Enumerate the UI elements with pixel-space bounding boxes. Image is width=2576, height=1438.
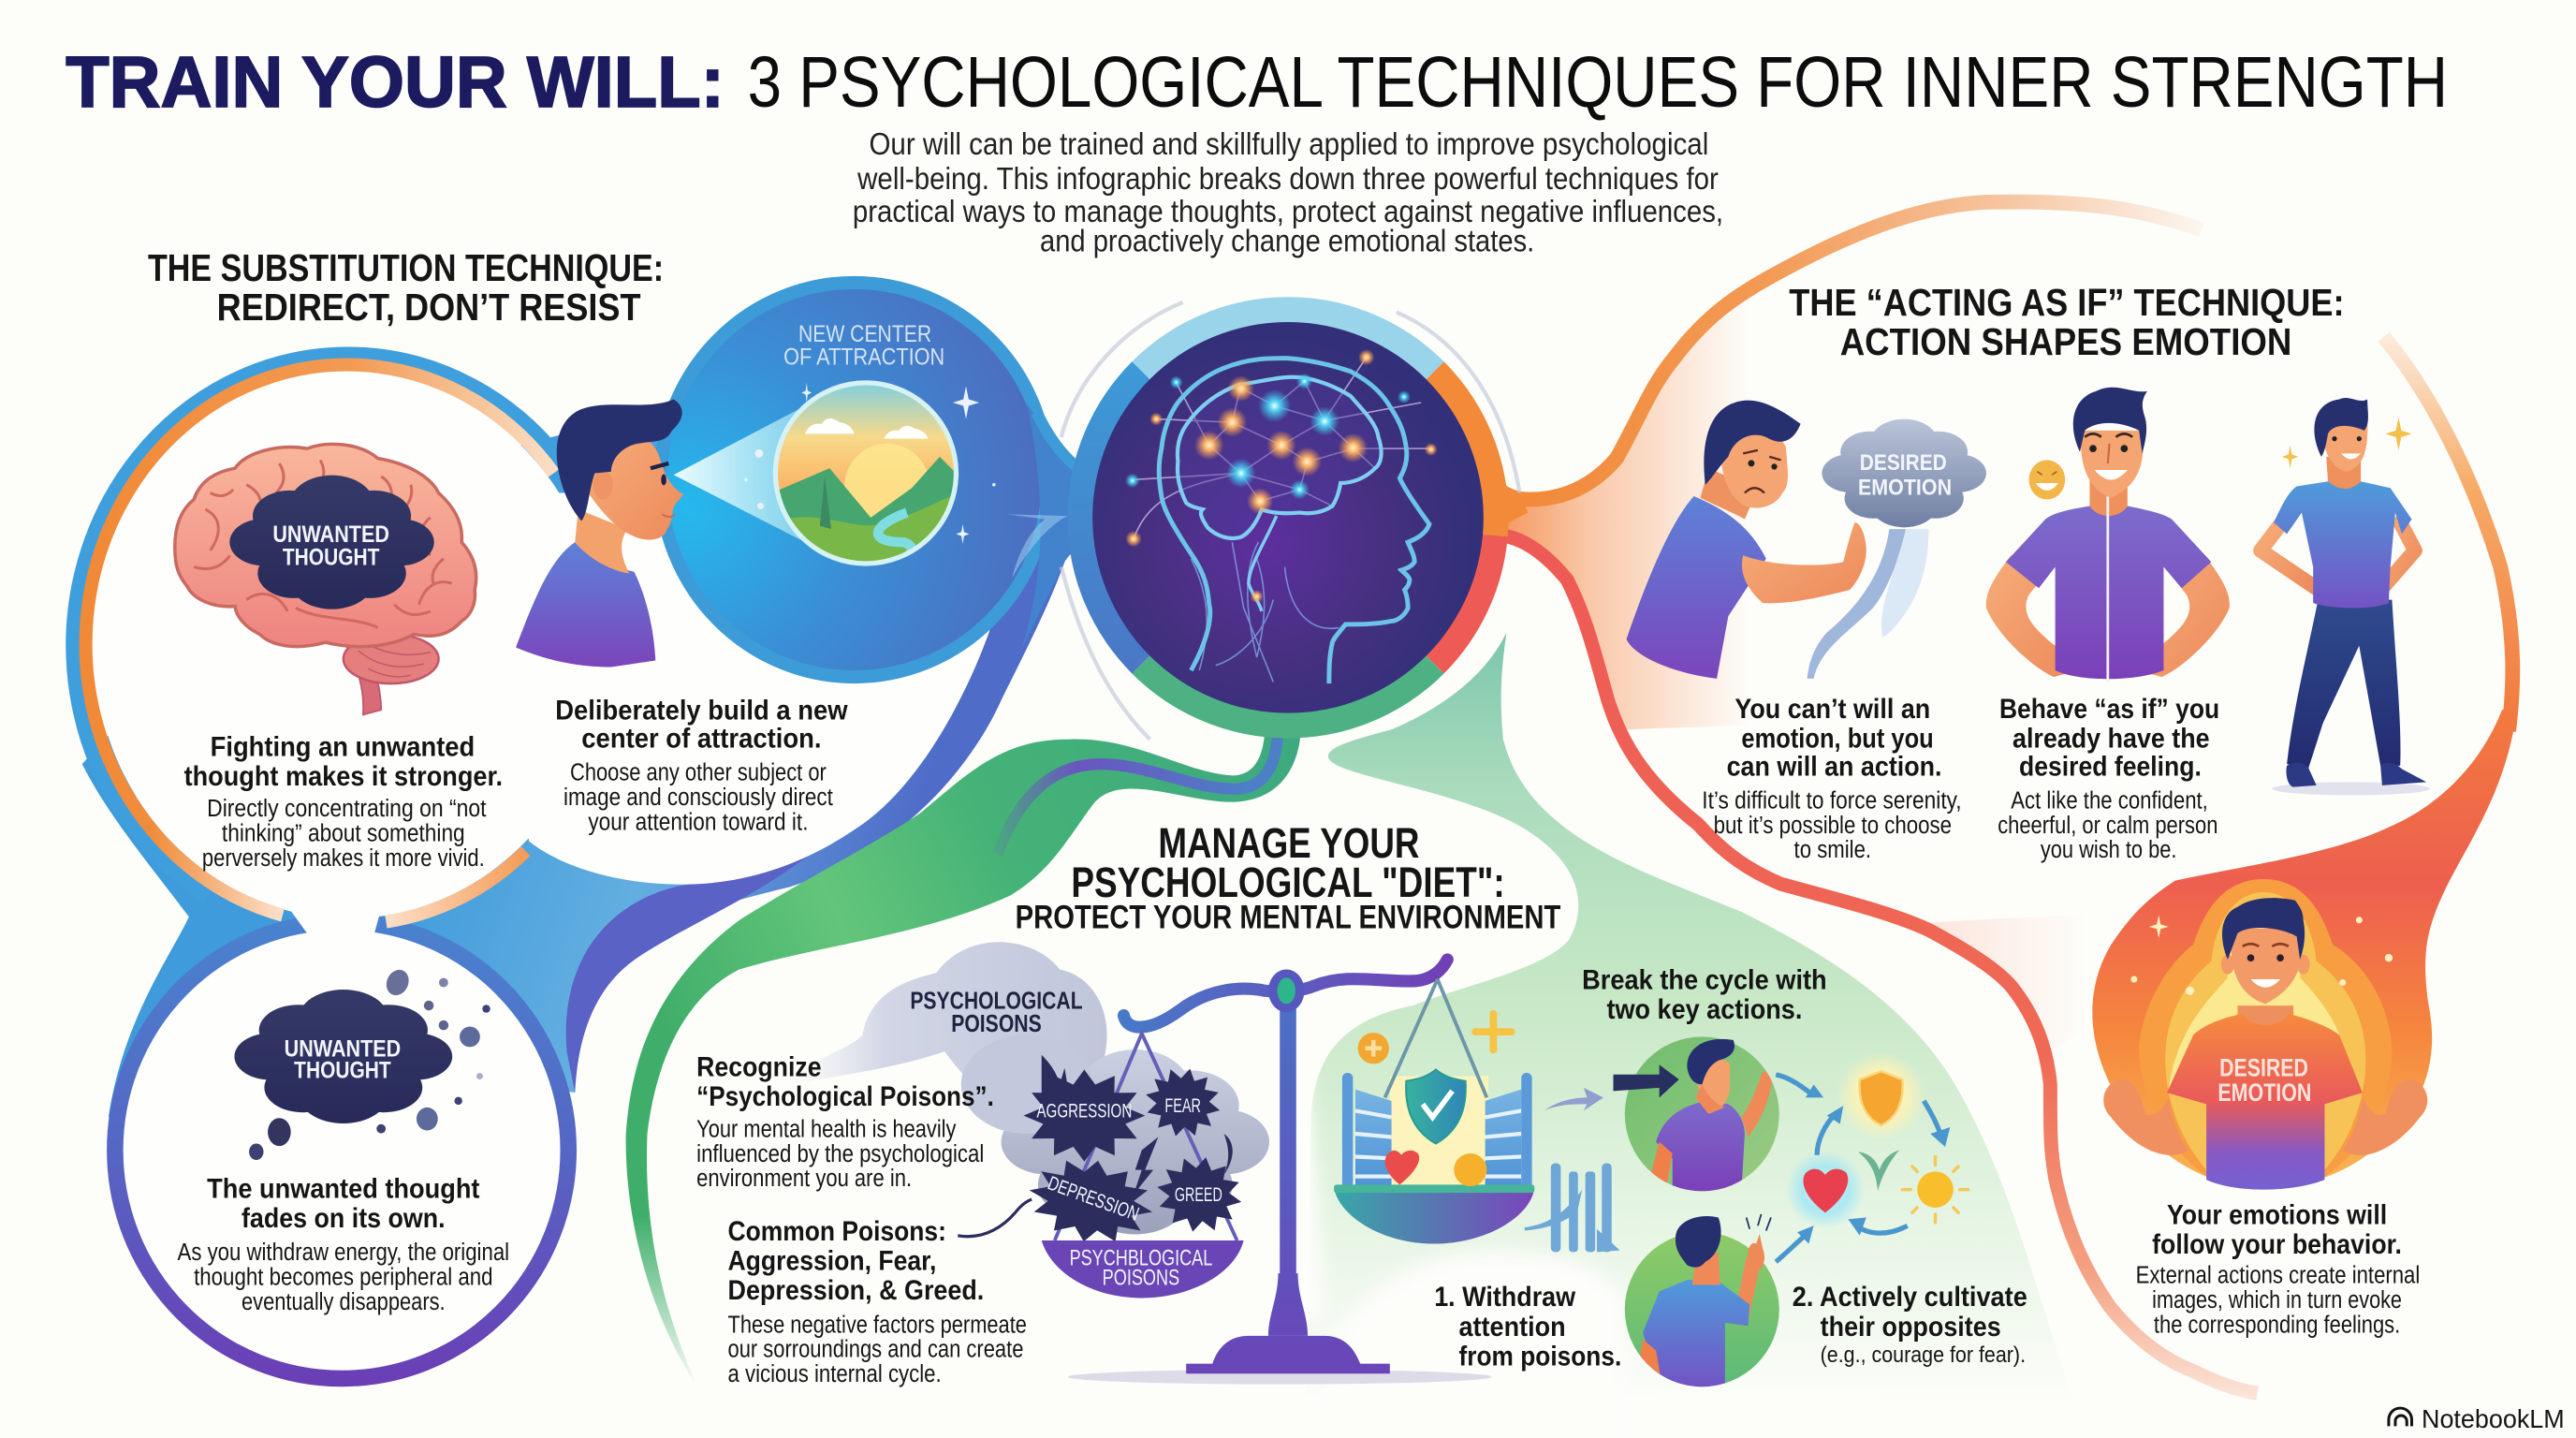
text: your emotions will follow: External actions create internal [2136, 1263, 2420, 1289]
left pan: PSYCHBLOGICAL [1070, 1246, 1212, 1270]
flame lobe: your emotions follow [2092, 710, 2517, 1188]
shirt label: desired emotion: DESIRED [2219, 1053, 2308, 1082]
orange connector arc [1484, 202, 2512, 731]
text: your emotions will follow: images, which in turn evoke [2152, 1287, 2402, 1313]
text: behave as if [1998, 694, 2219, 863]
brain with unwanted thought cloud [175, 444, 476, 714]
panel: manage your psychological diet [616, 633, 2073, 1438]
poison labels: POISONS [951, 1011, 1042, 1037]
text: recognize psychological poisons: “Psychological Poisons”. [696, 1081, 994, 1112]
cycle of opposites icons [1776, 1051, 1969, 1262]
heading: substitution technique [148, 246, 664, 329]
icon: sun coin [1454, 1153, 1486, 1186]
text: fighting an unwanted thought: thinking” about something [222, 821, 465, 847]
dark circle [1092, 322, 1484, 713]
orange ring on first lobe [86, 365, 553, 922]
central hub: head with glowing brain [1061, 302, 1519, 740]
text: withdraw attention: 1. Withdraw [1434, 1282, 1576, 1313]
heading: manage your psychological diet: MANAGE YOUR [1158, 819, 1419, 867]
heading: substitution technique: THE SUBSTITUTION TECHNIQUE: [148, 246, 664, 289]
blue connecting network [74, 318, 1104, 1117]
text: your emotions will follow: the corresponding feelings. [2154, 1312, 2400, 1338]
heading: manage your psychological diet: PSYCHOLOGICAL "DIET": [1071, 858, 1505, 906]
person with desired emotion [2103, 898, 2427, 1190]
icon: heart [1385, 1151, 1419, 1184]
icon: sprout [1858, 1151, 1899, 1191]
arrow into person [1614, 1064, 1679, 1097]
heading: manage your psychological diet: PROTECT YOUR MENTAL ENVIRONMENT [1016, 900, 1561, 936]
person: withdraw attention [1625, 1036, 1779, 1199]
text: deliberately build a new center: center of attraction. [581, 724, 822, 755]
text: you can't will an emotion [1702, 694, 1962, 863]
person looking at new center [516, 399, 683, 668]
text: the unwanted thought fades: fades on its own. [242, 1203, 446, 1234]
gold sparkles [2282, 418, 2411, 468]
text: common poisons: Depression, & Greed. [728, 1275, 984, 1306]
text: deliberately build a new center [555, 696, 848, 835]
fading cloud label: UNWANTED [285, 1036, 401, 1062]
text: the unwanted thought fades: eventually disappears. [242, 1289, 446, 1315]
poison labels: FEAR [1164, 1095, 1201, 1117]
icon: gold plus [1475, 1014, 1512, 1049]
lobe: unwanted thought fades [115, 922, 568, 1378]
neck joining hub [1022, 403, 1104, 649]
flame halo [2139, 879, 2392, 1177]
white gap between lobes [289, 909, 381, 945]
red connector arc [1486, 534, 2258, 1393]
text: common poisons: These negative factors permeate [728, 1312, 1027, 1338]
lobe: fighting an unwanted thought [94, 373, 603, 918]
cloud label [272, 522, 389, 571]
head outline [1159, 359, 1429, 683]
neural connections [1132, 357, 1431, 682]
icon: gold shield [1860, 1071, 1903, 1125]
arrow to person [1544, 1088, 1603, 1110]
brain outline [1178, 377, 1382, 538]
text: common poisons [728, 1216, 1027, 1387]
text: cultivate opposites: their opposites [1821, 1312, 2001, 1343]
swoosh on neck [1007, 514, 1068, 579]
text: cultivate opposites: (e.g., courage for fear). [1821, 1343, 2026, 1368]
text: recognize psychological poisons [696, 1052, 994, 1192]
text: break the cycle: two key actions. [1606, 994, 1802, 1025]
text: recognize psychological poisons: Your mental health is heavily [696, 1116, 957, 1142]
introduction text: Our will can be trained and skillfully applied to improve psychological [869, 127, 1708, 162]
glowing nodes [1125, 349, 1438, 603]
heading: substitution technique: REDIRECT, DON’T RESIST [217, 286, 641, 329]
text: deliberately build a new center: your attention toward it. [588, 809, 809, 835]
flame sparkles [2130, 916, 2393, 995]
text: recognize psychological poisons: environment you are in. [696, 1166, 912, 1192]
desired emotion cloud [1808, 419, 1986, 679]
text: your emotions will follow: follow your behavior. [2152, 1229, 2402, 1260]
label: new center of attraction: NEW CENTER [798, 322, 931, 347]
poison labels: PSYCHOLOGICAL [910, 989, 1083, 1015]
title [66, 42, 2448, 123]
NotebookLM logo: NotebookLM [2422, 1404, 2565, 1433]
text: common poisons: Common Poisons: [728, 1216, 946, 1247]
poison labels: GREED [1175, 1184, 1222, 1206]
scene: new center of attraction [772, 381, 959, 572]
light green background blob [1306, 633, 2073, 1400]
text: behave as if: you wish to be. [2041, 837, 2177, 863]
icon: smiling emoji [2029, 460, 2065, 500]
peach wash inside lobe [1486, 263, 1808, 729]
text: fighting an unwanted thought: thought makes it stronger. [184, 761, 503, 792]
text: cultivate opposites [1793, 1282, 2027, 1368]
label: new center of attraction: OF ATTRACTION [783, 345, 944, 371]
text: deliberately build a new center: image and consciously direct [564, 785, 833, 811]
text: you can't will an emotion: You can’t will an [1734, 694, 1930, 725]
text: you can't will an emotion: can will an action. [1727, 751, 1942, 782]
fading cloud label: THOUGHT [294, 1058, 391, 1083]
text: cultivate opposites: 2. Actively cultivate [1793, 1282, 2027, 1313]
introduction text: practical ways to manage thoughts, protect against negative influences, [853, 195, 1723, 229]
introduction text: well-being. This infographic breaks down three powerful techniques for [856, 162, 1719, 197]
introduction text [853, 127, 1723, 259]
text: behave as if: Act like the confident, [2011, 787, 2208, 814]
text: the unwanted thought fades: The unwanted thought [207, 1173, 480, 1204]
cloud label: UNWANTED [272, 522, 389, 548]
text: you can't will an emotion: to smile. [1794, 837, 1871, 863]
text: the unwanted thought fades: thought becomes peripheral and [194, 1264, 493, 1290]
right pan with protected gate [1334, 979, 1534, 1244]
text: behave as if: Behave “as if” you [1999, 694, 2219, 725]
text: your emotions will follow [2136, 1199, 2420, 1338]
desired emotion cloud: DESIRED [1860, 451, 1947, 476]
spinal stem [1249, 516, 1277, 611]
light cone [674, 404, 809, 544]
poison labels: DEPRESSION [1045, 1173, 1142, 1225]
icon: check [1423, 1091, 1453, 1117]
shirt label: desired emotion [2217, 1053, 2311, 1107]
desired emotion cloud: EMOTION [1858, 476, 1952, 500]
icon: plus coin [1358, 1033, 1389, 1064]
text: common poisons: Aggression, Fear, [728, 1246, 936, 1277]
poison labels [910, 989, 1222, 1225]
person standing confident [2261, 398, 2430, 795]
sparkles [744, 383, 996, 544]
poison pan strings [1055, 1034, 1237, 1240]
text: recognize psychological poisons: influenced by the psychological [696, 1141, 984, 1167]
poison labels: AGGRESSION [1036, 1100, 1132, 1122]
text: you can't will an emotion: but it’s possible to choose [1714, 813, 1952, 839]
scale stand [1068, 960, 1492, 1385]
green connector band [616, 723, 1301, 1397]
text: break the cycle [1582, 965, 1827, 1025]
withdrawal bars [1525, 1164, 1620, 1252]
psychological poisons smog clouds [788, 942, 1269, 1234]
text: withdraw attention: attention [1459, 1312, 1566, 1343]
title: TRAIN YOUR WILL: [66, 42, 724, 123]
icon: red heart [1803, 1169, 1848, 1212]
person acting as if, front view [1986, 388, 2230, 682]
text: common poisons: our sorroundings and can create [728, 1337, 1023, 1363]
left pan: POISONS [1103, 1266, 1179, 1290]
person pushing against emotion [1627, 401, 1866, 679]
hub ring segments [1080, 310, 1496, 726]
text: withdraw attention: from poisons. [1459, 1341, 1621, 1372]
text: deliberately build a new center: Deliberately build a new [555, 696, 848, 726]
text: fighting an unwanted thought [184, 731, 503, 872]
heading: acting as if technique: ACTION SHAPES EMOTION [1840, 320, 2291, 363]
panel: the substitution technique [74, 246, 1104, 1378]
soft white mound and left fade [1281, 1068, 1627, 1438]
thin swooshes [1061, 302, 1519, 740]
text: fighting an unwanted thought: perversely makes it more vivid. [202, 845, 485, 872]
shirt label: desired emotion: EMOTION [2217, 1078, 2311, 1107]
icon: shield [1406, 1070, 1466, 1143]
text: recognize psychological poisons: Recognize [696, 1052, 822, 1083]
cycle arrows [1776, 1075, 1950, 1262]
heading: acting as if technique: THE “ACTING AS IF” TECHNIQUE: [1789, 281, 2345, 324]
lobe: deliberately build a new center [493, 493, 990, 885]
cloud label: THOUGHT [283, 546, 379, 571]
text: you can't will an emotion: It’s difficult to force serenity, [1702, 787, 1962, 814]
text: the unwanted thought fades [178, 1173, 509, 1315]
icon: sun [1902, 1157, 1969, 1223]
new center circle [661, 283, 1048, 677]
text: break the cycle: Break the cycle with [1582, 965, 1827, 996]
person: cultivate opposites [1625, 1214, 1779, 1388]
heading: acting as if technique [1789, 281, 2345, 363]
poison starbursts [958, 1055, 1248, 1253]
text: common poisons: a vicious internal cycle. [728, 1361, 942, 1387]
text: withdraw attention [1434, 1282, 1621, 1372]
pink wash under lobe [1914, 912, 2136, 1051]
text: you can't will an emotion: emotion, but you [1741, 724, 1934, 755]
panel: the acting as if technique [1484, 202, 2517, 1393]
heading: manage your psychological diet [1016, 819, 1561, 936]
introduction text: and proactively change emotional states. [1040, 225, 1534, 259]
text: fighting an unwanted thought: Directly concentrating on “not [207, 796, 487, 822]
text: your emotions will follow: Your emotions will [2167, 1199, 2387, 1230]
left pan [1042, 1240, 1244, 1298]
fading cloud label [285, 1036, 401, 1083]
dark cloud in brain [229, 476, 434, 609]
text: fighting an unwanted thought: Fighting an unwanted [211, 731, 475, 762]
label: new center of attraction [783, 322, 944, 371]
text: the unwanted thought fades: As you withdraw energy, the original [178, 1240, 509, 1266]
text: deliberately build a new center: Choose any other subject or [570, 760, 827, 786]
fading thought cloud [234, 966, 490, 1160]
text: behave as if: already have the [2012, 724, 2210, 755]
text: behave as if: desired feeling. [2019, 751, 2202, 782]
text: behave as if: cheerful, or calm person [1998, 813, 2217, 839]
